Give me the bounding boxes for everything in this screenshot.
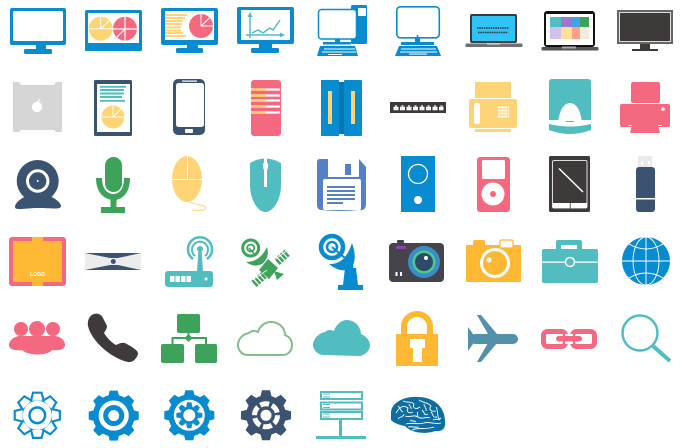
icon: monitor with bars and pie xyxy=(161,8,218,53)
icon: brain xyxy=(391,397,445,433)
icon: desktop computer with tower xyxy=(317,5,367,56)
icon: magnifying glass xyxy=(622,316,670,361)
icon: USB drive xyxy=(636,156,655,212)
icon: network switch xyxy=(390,102,446,113)
icon: monitor xyxy=(10,8,66,54)
icon: microphone xyxy=(99,157,127,213)
icon: chain link xyxy=(544,332,594,346)
icon: floppy disk xyxy=(317,159,366,211)
icon: wifi router xyxy=(165,237,213,287)
icon: laptop with blue screen xyxy=(466,14,522,47)
icon: briefcase xyxy=(542,240,598,283)
icon: network diagram xyxy=(161,314,217,363)
icon: laptop with pie charts xyxy=(85,10,142,51)
icon: solid gear with ring xyxy=(89,391,139,441)
icon: fax machine xyxy=(469,82,517,132)
icon: printer xyxy=(620,82,670,133)
icon: cloud outline xyxy=(238,322,292,355)
icon: pink server xyxy=(251,80,281,136)
icon: laptop with tiled screen xyxy=(542,11,598,50)
icon: webcam xyxy=(15,160,61,209)
icon: speaker xyxy=(401,156,435,212)
icon: projector xyxy=(85,253,141,270)
icon: logo box xyxy=(9,237,66,286)
icon: padlock xyxy=(396,314,438,366)
icon: blue satellite dish xyxy=(321,236,363,290)
icon: book binder xyxy=(321,80,362,136)
icon: computer tower with apple logo xyxy=(13,82,62,132)
icon: globe xyxy=(622,237,670,285)
icon: music player xyxy=(477,157,510,212)
icon: green satellite xyxy=(243,240,288,284)
icon: airplane xyxy=(468,315,518,362)
icon: navy gear xyxy=(241,390,291,440)
icon: server rack on network xyxy=(316,392,366,439)
icon: desktop computer xyxy=(395,7,441,56)
icon: gear with inner gear xyxy=(164,390,214,440)
icon: tablet with chart xyxy=(94,80,132,136)
icon: solid cloud xyxy=(313,320,370,356)
icon: teal computer mouse xyxy=(250,158,281,212)
icon: drawing tablet xyxy=(549,156,590,212)
icon: outlined gear xyxy=(16,394,59,437)
icon: monitor with line chart xyxy=(237,7,294,53)
icon: teal scanner xyxy=(549,79,591,134)
icon: dark camera xyxy=(389,240,444,282)
icon: telephone handset xyxy=(88,314,138,362)
icon: group of people xyxy=(9,321,65,354)
icon: dark flat monitor xyxy=(617,10,673,51)
logo label: LOGO xyxy=(30,272,45,278)
icon: yellow computer mouse xyxy=(172,156,206,211)
icon: smartphone xyxy=(173,79,205,135)
icon: yellow camera xyxy=(466,240,521,282)
